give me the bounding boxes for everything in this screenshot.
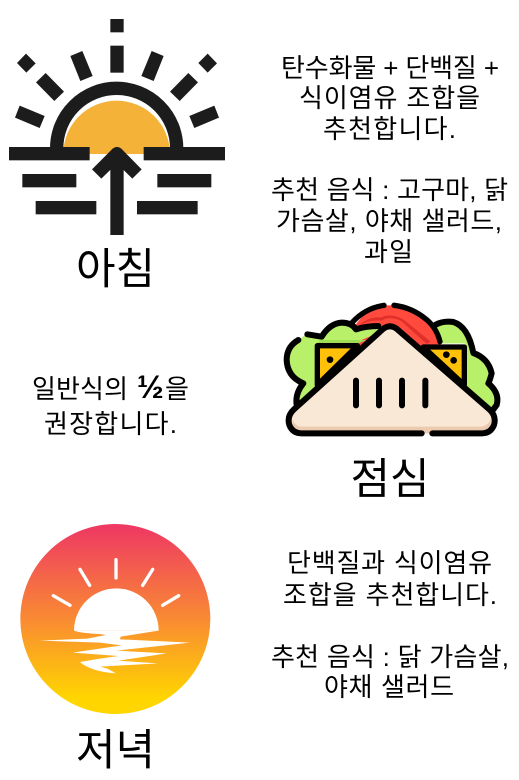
text block: morning advice: 과일 [364,237,413,267]
lettuce [286,322,497,412]
text block: lunch advice: 일반식의 [32,374,128,404]
tortilla [289,326,495,433]
text block: dinner advice: 추천 음식 : 닭 가슴살, [271,642,509,672]
text block: morning advice: 가슴살, 야채 샐러드, [276,206,502,236]
text block: lunch advice: ½ [137,369,164,405]
tomato [352,305,441,347]
tomato outline [352,305,440,342]
icon: sunset [20,524,210,714]
text block: lunch advice: 을 [165,374,189,404]
icon: sunrise [9,19,225,235]
heading: lunch: 점심 [350,445,430,507]
text block: morning advice: 식이염유 조합을 [299,83,480,113]
icon: taco [286,305,497,433]
text block: morning advice: 탄수화물 + 단백질 + [281,53,499,83]
text block: dinner advice: 단백질과 식이염유 [287,548,492,578]
text block: dinner advice: 조합을 추천합니다. [283,580,497,610]
heading: morning: 아침 [76,235,155,297]
text block: morning advice: 추천합니다. [323,114,456,144]
text block: dinner advice [271,548,509,702]
text block: morning advice: 추천 음식 : 고구마, 닭 [271,175,508,205]
text block: lunch advice: 권장합니다. [44,409,177,439]
text block: morning advice [271,53,508,267]
heading: dinner: 저녁 [76,716,155,778]
text block: lunch advice [32,369,189,439]
text block: dinner advice: 야채 샐러드 [324,672,454,702]
cheese [317,346,464,385]
